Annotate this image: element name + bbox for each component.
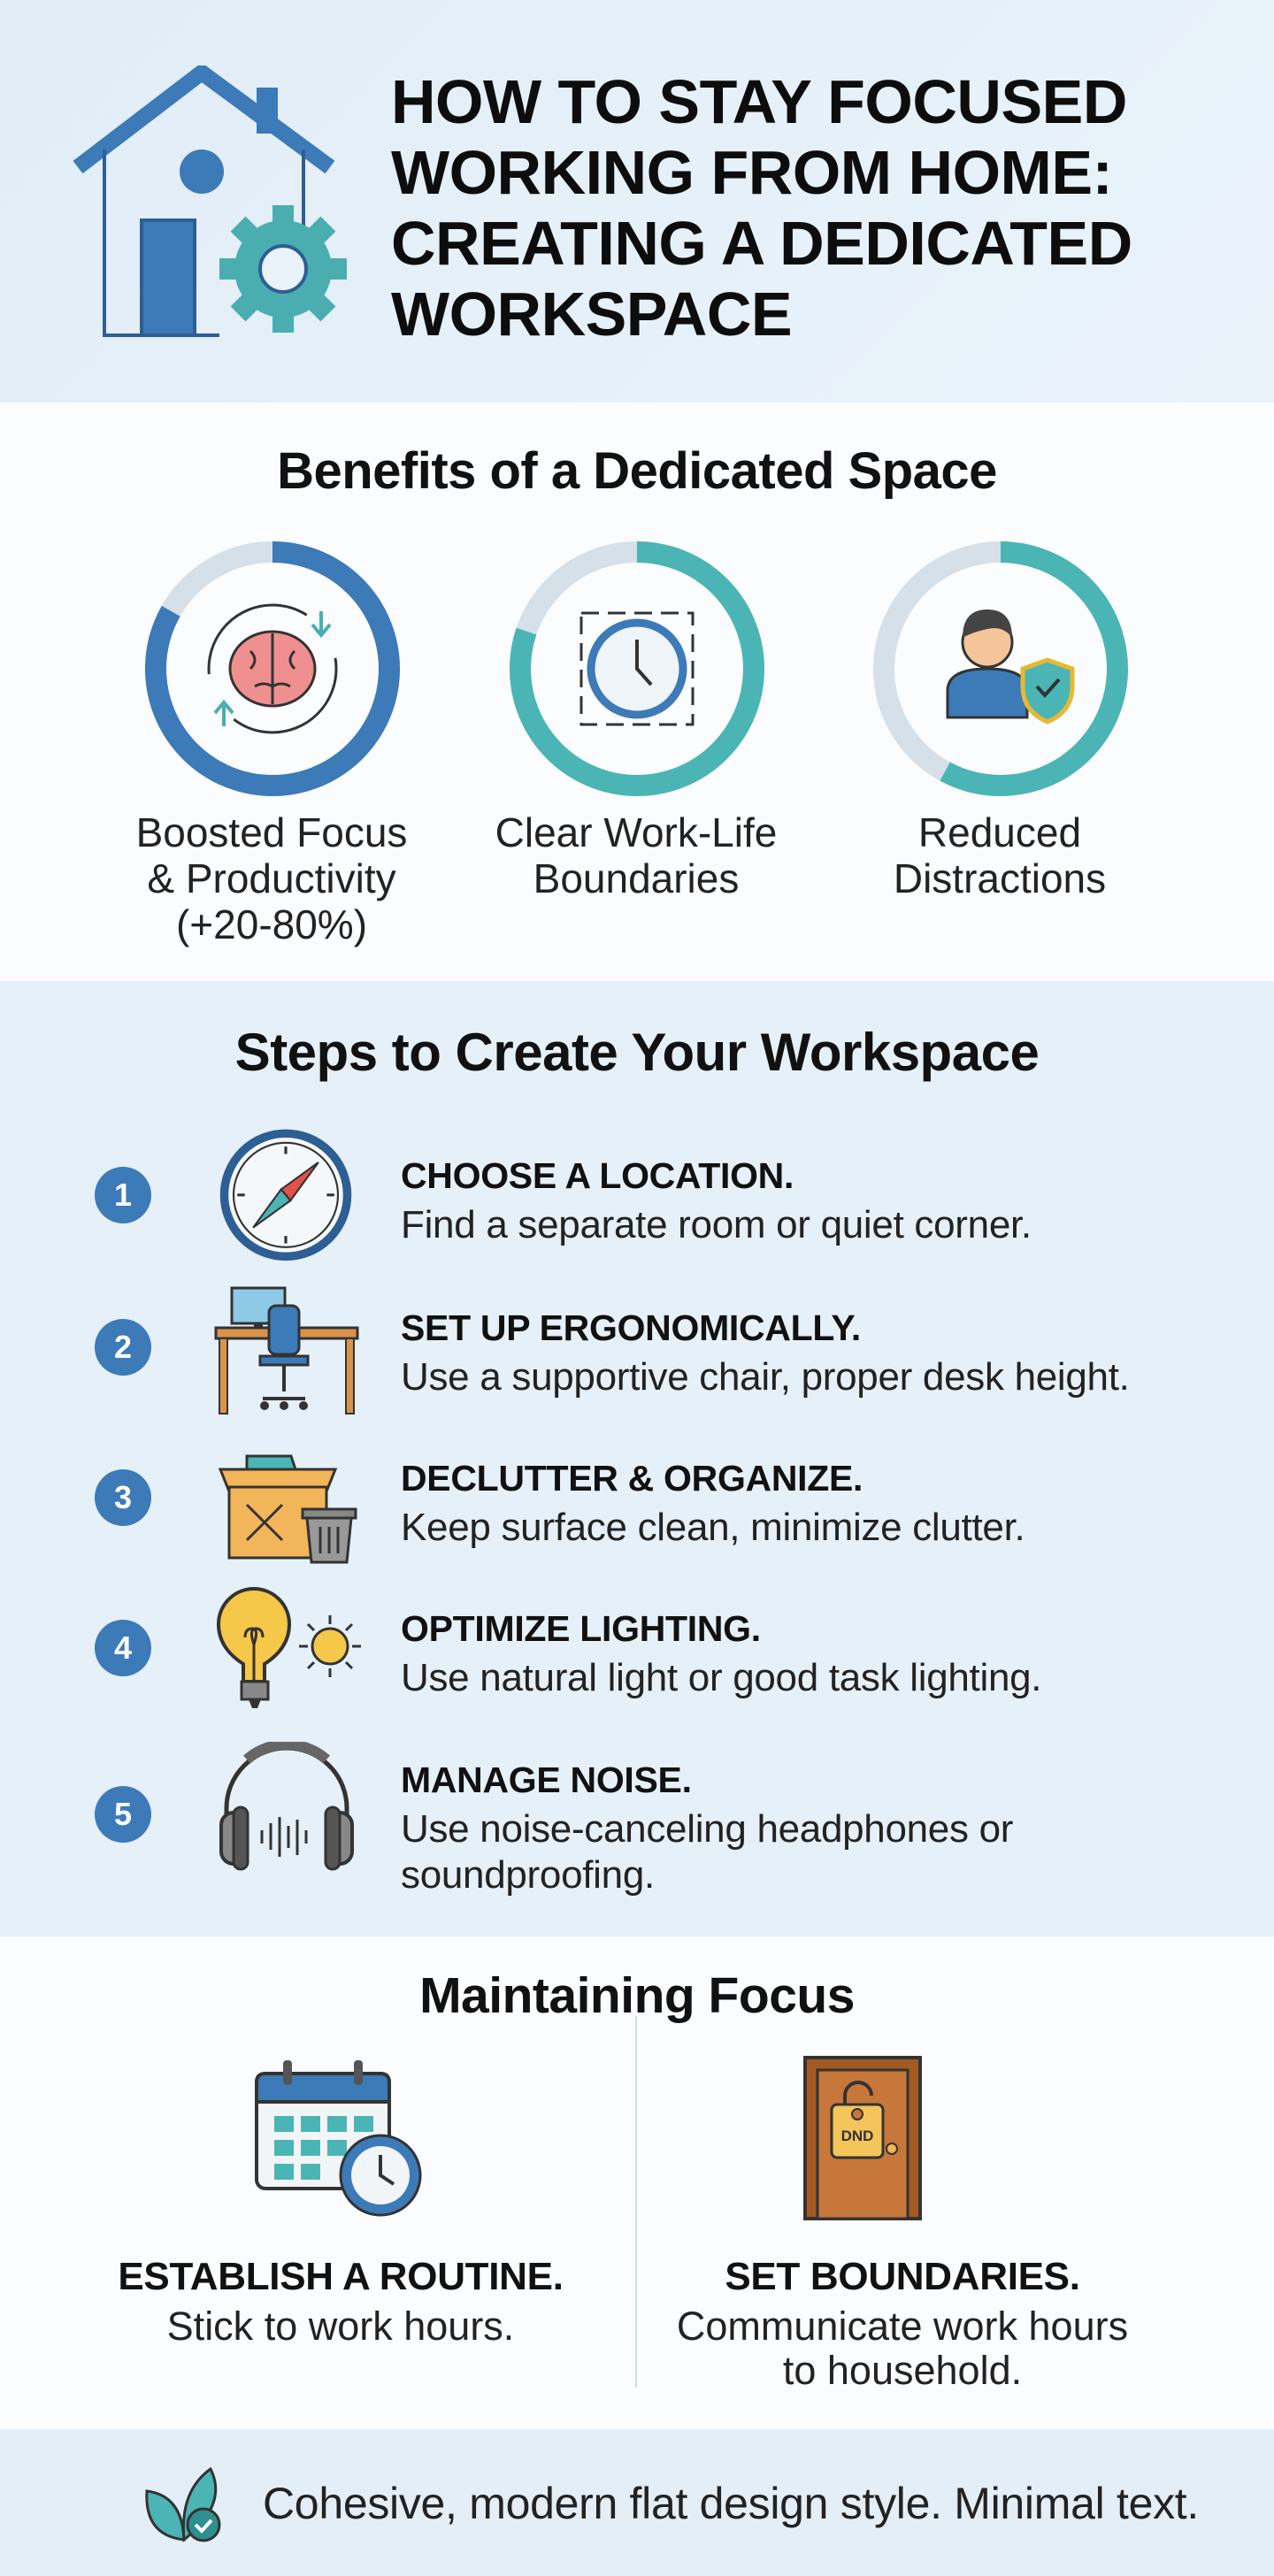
benefit 2: work-life <box>495 541 777 901</box>
step 5 <box>95 1742 1013 1897</box>
heading: steps: Steps to Create Your Workspace <box>235 1023 1039 1082</box>
ring chart 3 <box>873 541 1128 796</box>
label 3: Distractions <box>894 855 1106 901</box>
text: step 1 <box>401 1155 1032 1246</box>
label 2: Boundaries <box>533 855 739 901</box>
text: step 2: Use a supportive chair, proper desk height. <box>401 1355 1130 1399</box>
benefit 3: distractions <box>873 541 1128 901</box>
icon: box and bin <box>218 1454 357 1564</box>
text: step 3: DECLUTTER & ORGANIZE. <box>401 1458 863 1499</box>
text: step 4: OPTIMIZE LIGHTING. <box>401 1608 761 1649</box>
text: step 2 <box>401 1307 1130 1399</box>
panel: steps <box>0 981 1274 1936</box>
text: step 2: SET UP ERGONOMICALLY. <box>401 1307 861 1348</box>
number 2 <box>95 1319 151 1376</box>
text: step 3: Keep surface clean, minimize clutter. <box>401 1506 1025 1549</box>
icon: door with DND sign: DND <box>841 2128 873 2144</box>
text: step 5 <box>401 1760 1013 1897</box>
text: step 5: MANAGE NOISE. <box>401 1760 692 1800</box>
ring chart 2 <box>510 541 764 796</box>
number 5: 5 <box>114 1796 132 1832</box>
step 4 <box>95 1587 1041 1708</box>
text: step 1: Find a separate room or quiet corner. <box>401 1203 1032 1246</box>
label 2: Clear Work-Life <box>495 809 777 855</box>
step 3 <box>95 1454 1025 1564</box>
text: routine: ESTABLISH A ROUTINE. <box>118 2255 564 2298</box>
number 4 <box>95 1620 151 1676</box>
text: boundaries: Communicate work hours <box>677 2304 1128 2349</box>
number 1 <box>95 1167 151 1223</box>
label 1: (+20-80%) <box>176 901 367 947</box>
title: CREATING A DEDICATED <box>391 209 1132 278</box>
text: routine <box>118 2255 564 2349</box>
icon: calendar clock <box>255 2060 421 2217</box>
footer <box>0 2429 1274 2576</box>
heading: maintaining focus: Maintaining Focus <box>419 1967 855 2024</box>
number 4: 4 <box>114 1629 132 1666</box>
number 3 <box>95 1469 151 1526</box>
number 3: 3 <box>114 1479 132 1515</box>
step 1 <box>95 1129 1032 1261</box>
benefit 1: boosted focus <box>136 541 407 947</box>
title: WORKSPACE <box>391 280 792 349</box>
icon: bulb and sun <box>217 1587 361 1708</box>
text: step 1: CHOOSE A LOCATION. <box>401 1155 794 1196</box>
ring chart 1 <box>145 541 400 796</box>
icon: headphones <box>219 1742 354 1870</box>
footer text: Cohesive, modern flat design style. Minimal text. <box>263 2479 1199 2528</box>
panel: maintaining focus <box>0 1936 1274 2429</box>
text: step 5: soundproofing. <box>401 1853 655 1897</box>
label 3: Reduced <box>918 809 1081 855</box>
text: step 4 <box>401 1608 1041 1699</box>
title <box>391 67 1132 349</box>
label 1: & Productivity <box>147 855 396 901</box>
label 1 <box>136 809 407 947</box>
text: step 5: Use noise-canceling headphones or <box>401 1807 1013 1851</box>
heading: benefits: Benefits of a Dedicated Space <box>277 442 997 500</box>
icon: leaves with check <box>145 2466 221 2542</box>
header band <box>0 0 1274 402</box>
label 3 <box>894 809 1106 901</box>
number 1: 1 <box>114 1177 132 1213</box>
title: HOW TO STAY FOCUSED <box>391 67 1127 136</box>
tip: routine <box>118 2060 564 2349</box>
tip: boundaries <box>677 2056 1128 2393</box>
text: boundaries <box>677 2255 1128 2393</box>
label 1: Boosted Focus <box>136 809 407 855</box>
text: boundaries: to household. <box>783 2348 1022 2393</box>
icon: door with DND sign <box>803 2056 922 2220</box>
text: step 4: Use natural light or good task lighting. <box>401 1656 1041 1699</box>
number 2: 2 <box>114 1329 132 1365</box>
panel: benefits <box>0 402 1274 981</box>
icon: compass <box>219 1129 352 1261</box>
step 2 <box>95 1286 1130 1414</box>
text: step 3 <box>401 1458 1025 1549</box>
text: routine: Stick to work hours. <box>167 2304 514 2349</box>
icon: house with gear <box>73 65 347 337</box>
icon: desk and chair <box>214 1286 359 1414</box>
text: boundaries: SET BOUNDARIES. <box>725 2255 1080 2298</box>
number 5 <box>95 1786 151 1843</box>
label 2 <box>495 809 777 901</box>
title: WORKING FROM HOME: <box>391 138 1112 207</box>
